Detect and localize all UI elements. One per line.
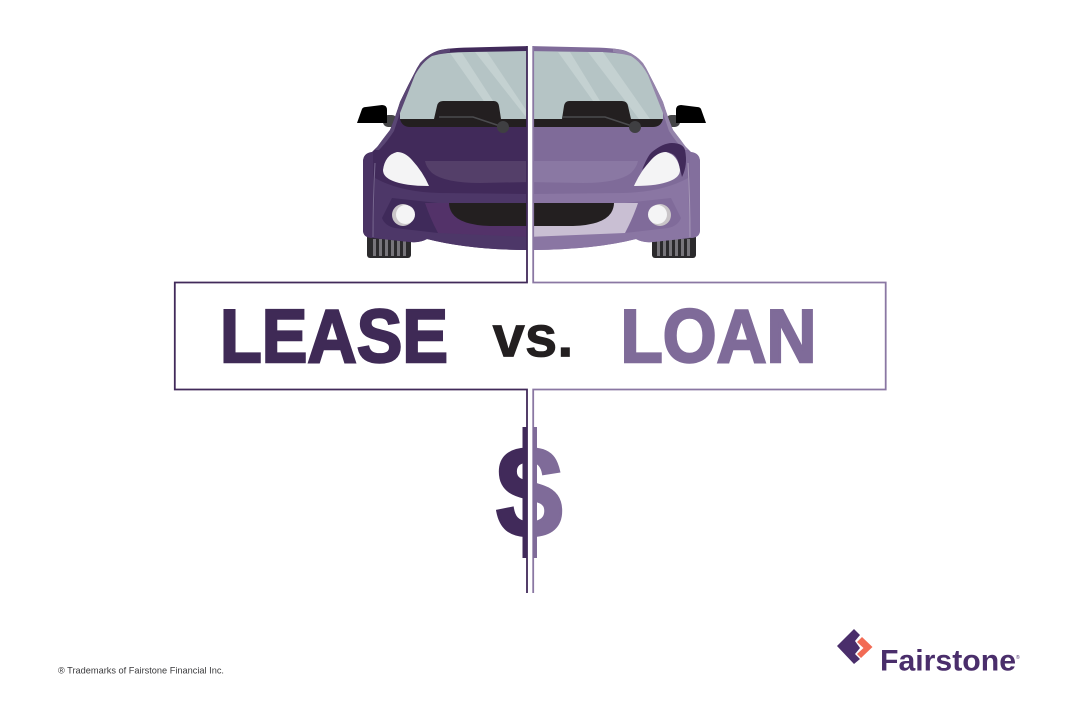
right windshield xyxy=(528,51,663,119)
dollar sign: lease half xyxy=(496,427,526,558)
left fog lamp xyxy=(392,204,415,226)
right lower bumper xyxy=(528,178,690,250)
left headlight xyxy=(383,152,429,186)
heading: LOAN: LOAN xyxy=(620,294,816,378)
right fog lamp xyxy=(648,204,671,226)
right grille xyxy=(528,203,614,226)
right windshield glare xyxy=(558,52,650,119)
right tyre xyxy=(652,237,696,258)
left fog recess xyxy=(382,198,438,233)
right headlight eyelid xyxy=(642,143,686,177)
right fog recess xyxy=(625,198,681,233)
left hood highlight xyxy=(425,161,530,183)
left A-pillar highlight xyxy=(375,48,450,150)
right headlight xyxy=(634,152,680,186)
left wiper block xyxy=(400,101,530,127)
left mirror xyxy=(357,105,397,127)
right wiper block xyxy=(528,101,663,127)
left tyre xyxy=(367,237,411,258)
heading: LEASE: LEASE xyxy=(220,294,448,378)
divider and box outline: lease side xyxy=(175,46,527,593)
right body side line xyxy=(688,163,690,237)
left body xyxy=(363,46,530,250)
right mirror xyxy=(666,105,706,127)
dollar sign: loan half: $ xyxy=(496,420,563,565)
right hood highlight xyxy=(528,161,638,183)
right bright bumper panel xyxy=(528,203,638,237)
logo trademark: ® xyxy=(1016,654,1020,661)
car: right half, light purple (loan) xyxy=(528,46,706,258)
logo wordmark: Fairstone xyxy=(880,644,1016,678)
left grille xyxy=(449,203,530,226)
left lower bumper xyxy=(373,178,530,250)
left body side line xyxy=(373,163,375,237)
dollar sign: loan half xyxy=(533,427,562,558)
footnote: ® Trademarks of Fairstone Financial Inc. xyxy=(58,666,224,676)
logo: Fairstone xyxy=(837,629,1020,678)
right wiper xyxy=(563,117,641,133)
logo diamond xyxy=(837,629,860,664)
right A-pillar highlight xyxy=(613,48,688,150)
left side pod shade xyxy=(363,152,373,238)
right body xyxy=(528,46,700,250)
right side pod shade xyxy=(690,152,700,238)
left windshield xyxy=(400,51,530,119)
dollar sign: lease half: $ xyxy=(496,420,563,565)
left windshield glare xyxy=(450,52,526,117)
logo chevron xyxy=(857,637,872,658)
heading: vs.: vs. xyxy=(492,304,574,370)
left wiper xyxy=(439,117,509,133)
left bright bumper panel xyxy=(425,203,438,232)
car: left half, dark purple (lease) xyxy=(357,46,530,258)
divider and box outline: loan side xyxy=(533,46,886,593)
